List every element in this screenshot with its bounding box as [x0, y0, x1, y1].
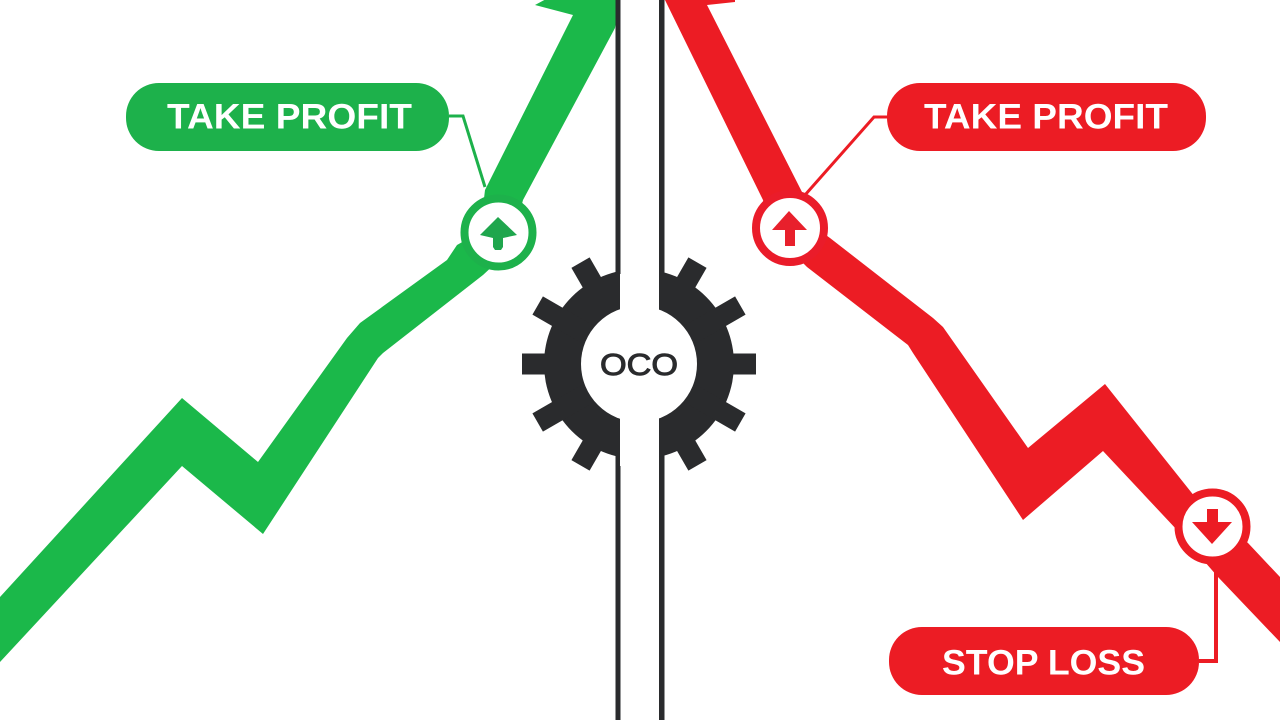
red take profit pill: TAKE PROFIT	[924, 98, 1168, 136]
green take profit marker	[464, 198, 532, 266]
green take profit pill	[126, 83, 449, 151]
red stop loss pill: STOP LOSS	[942, 644, 1145, 682]
stop loss connector	[1199, 562, 1216, 661]
red take profit marker	[756, 194, 824, 262]
green rising price line	[0, 0, 620, 662]
green take profit pill: TAKE PROFIT	[167, 98, 412, 136]
gear label: OCO	[600, 347, 678, 382]
red stop loss pill	[889, 627, 1199, 695]
OCO gear	[522, 257, 756, 471]
red falling price line	[665, 0, 1280, 642]
central divider with vertical lines	[616, 0, 664, 720]
red take profit pill	[887, 83, 1206, 151]
red stop loss marker	[1178, 492, 1246, 560]
take profit connector green	[449, 116, 485, 187]
take profit connector red	[805, 117, 887, 195]
